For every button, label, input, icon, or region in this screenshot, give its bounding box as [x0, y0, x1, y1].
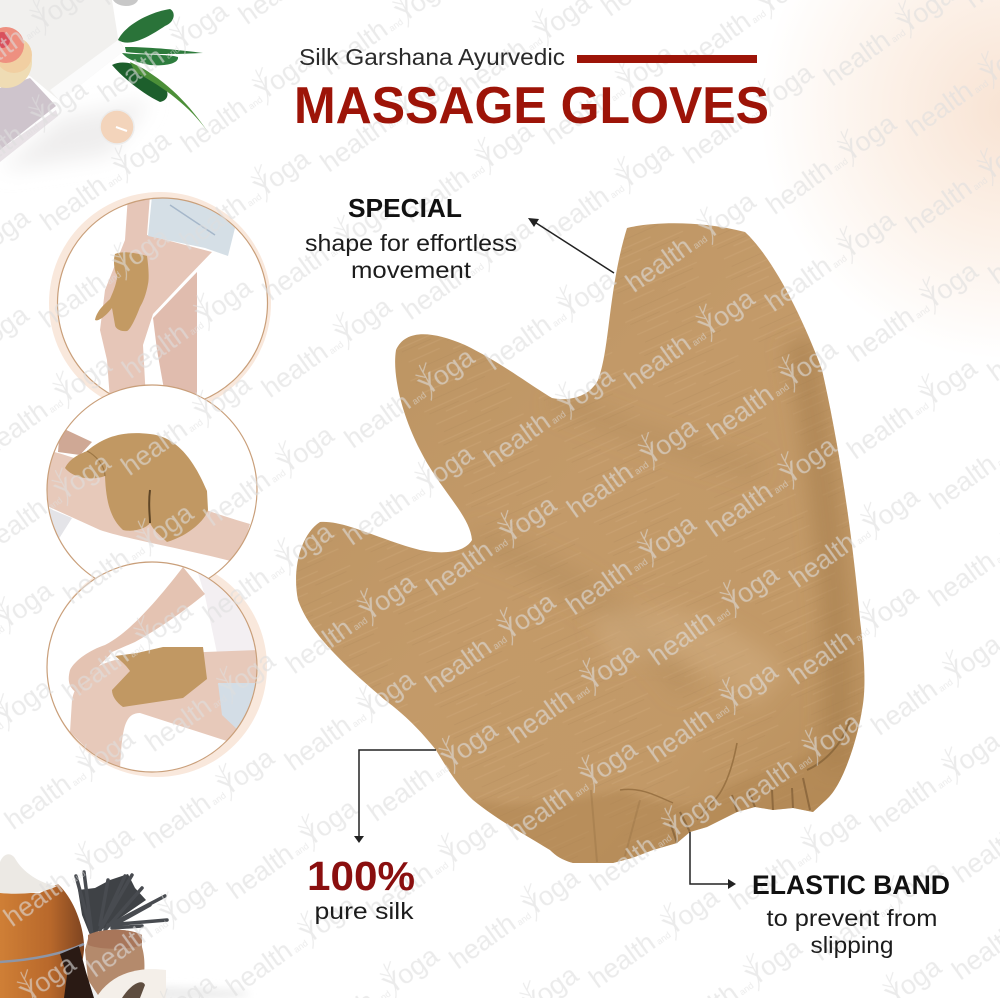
tea candle	[100, 110, 134, 144]
callout: special shape	[305, 193, 517, 283]
elastic gathered band and seam folds	[475, 746, 854, 863]
decorative crescent: third circle	[47, 557, 267, 777]
photo circle: glove on arm	[45, 385, 257, 595]
subtitle: Silk Garshana Ayurvedic	[299, 44, 565, 70]
top-left spa decoration	[0, 0, 210, 170]
title block	[294, 44, 769, 135]
arrow: elastic band	[690, 832, 736, 889]
callout: pure silk: pure silk	[314, 898, 414, 924]
arrow: pure silk	[354, 750, 436, 843]
title accent bar	[577, 55, 757, 63]
callout: special shape: shape for effortless	[305, 230, 517, 256]
top-right peach glow	[730, 0, 1000, 370]
lavender	[76, 872, 167, 935]
copper jar	[85, 930, 144, 998]
callout: elastic band: slipping	[810, 932, 894, 958]
bottom-left spa decoration	[0, 854, 250, 998]
callout: elastic band	[752, 870, 950, 958]
lavender towel	[0, 78, 56, 150]
callout: pure silk	[307, 853, 415, 924]
green leaves	[112, 9, 210, 135]
callout: special shape: movement	[351, 257, 472, 283]
white towel	[0, 0, 125, 101]
callout: pure silk: 100%	[307, 853, 415, 899]
callout: elastic band: ELASTIC BAND	[752, 870, 950, 900]
arrow: special shape	[528, 218, 614, 273]
decorative crescent: first circle	[49, 192, 271, 414]
callout: elastic band: to prevent from	[766, 905, 938, 931]
photo circle: glove on thigh	[58, 195, 268, 408]
usage photo circles	[45, 192, 271, 777]
flower	[0, 27, 32, 88]
photo circle: glove on knee	[47, 562, 260, 772]
callout: special shape: SPECIAL	[348, 193, 462, 223]
white wooden tray	[96, 969, 166, 998]
wood diffuser	[0, 884, 84, 998]
main title: MASSAGE GLOVES	[294, 77, 769, 135]
main silk glove	[290, 215, 870, 870]
oil bottle	[60, 946, 94, 998]
